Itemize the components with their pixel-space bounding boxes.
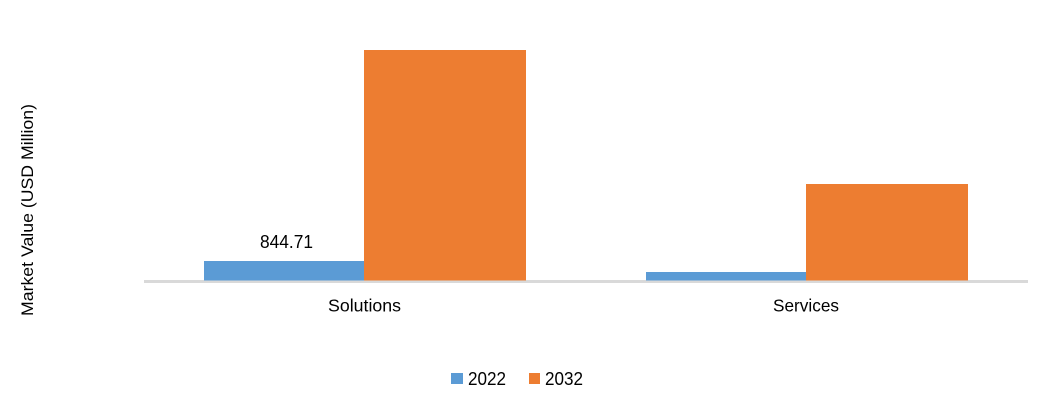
- value label: 844.71: 844.71: [260, 232, 313, 252]
- legend: [451, 369, 583, 389]
- legend swatch: 2022: [451, 373, 463, 384]
- legend swatch: 2032: [529, 373, 540, 384]
- legend label: 2032: 2032: [545, 369, 583, 389]
- legend label: 2022: 2022: [468, 369, 506, 389]
- y-axis title: Market Value (USD Million): [19, 104, 37, 316]
- x-axis line: [144, 280, 1028, 283]
- category label: Services: Services: [773, 296, 839, 316]
- group: Services: [646, 184, 968, 316]
- bar: Services 2032: [806, 184, 968, 280]
- bar: Solutions 2032: [364, 50, 526, 280]
- bar: Services 2022: [646, 272, 807, 280]
- group: Solutions: [204, 50, 526, 316]
- bar: Solutions 2022: [204, 261, 365, 280]
- category label: Solutions: Solutions: [328, 296, 401, 316]
